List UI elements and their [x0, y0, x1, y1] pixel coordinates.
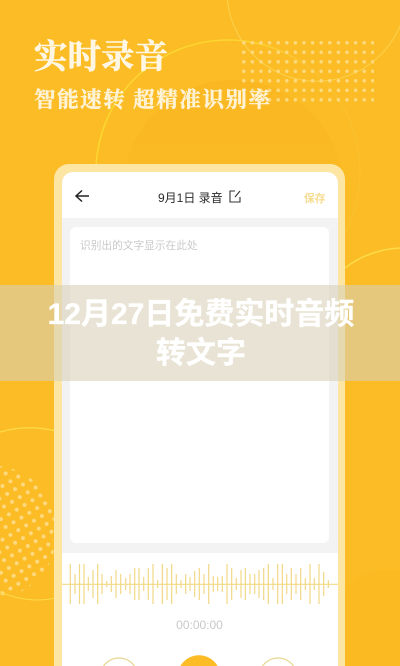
left control button	[104, 658, 134, 666]
main title: 12月27日免费实时音频	[48, 298, 354, 331]
main title: 转文字	[156, 336, 246, 370]
main title	[48, 298, 354, 370]
curve below the dots	[0, 592, 56, 600]
screen title: 9月1日 录音	[158, 190, 223, 205]
dot pattern: lower left	[0, 466, 56, 598]
phone frame	[54, 164, 345, 666]
right control button	[262, 658, 294, 666]
subheading: 智能速转 超精准识别率	[34, 88, 270, 112]
dot pattern: top right	[241, 40, 374, 106]
phone screen	[62, 172, 338, 666]
back arrow	[76, 190, 89, 202]
heading: real-time recording: 实时录音	[34, 39, 168, 76]
title banner	[0, 285, 400, 381]
record button	[180, 655, 218, 666]
placeholder text: 识别出的文字显示在此处	[80, 239, 198, 252]
edit icon	[230, 191, 240, 202]
text panel	[70, 227, 329, 543]
waveform	[62, 564, 338, 604]
save button: 保存	[304, 192, 326, 205]
timer: 00:00:00	[176, 618, 223, 632]
